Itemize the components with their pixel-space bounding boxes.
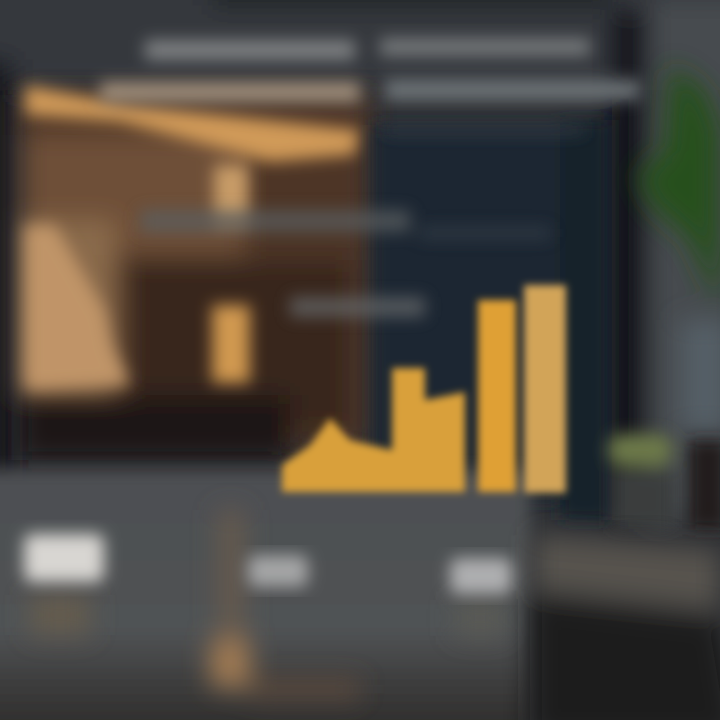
background wall <box>0 0 720 520</box>
stat highlight: right <box>450 558 512 594</box>
bar chart <box>282 285 566 493</box>
reflection on table <box>30 510 505 698</box>
plant <box>635 65 720 430</box>
floor / table <box>0 470 530 720</box>
subtitle text blurred <box>140 210 550 317</box>
warm ceiling light <box>25 85 360 225</box>
side table <box>530 535 720 720</box>
stat highlight: center <box>248 555 308 587</box>
small potted plant <box>608 434 720 530</box>
title text blurred <box>100 38 640 134</box>
panel: warm interior photo <box>20 95 370 460</box>
warm fireplace glow <box>25 225 250 390</box>
panel: dark navy board <box>372 120 610 520</box>
stat highlight: left <box>24 534 104 582</box>
